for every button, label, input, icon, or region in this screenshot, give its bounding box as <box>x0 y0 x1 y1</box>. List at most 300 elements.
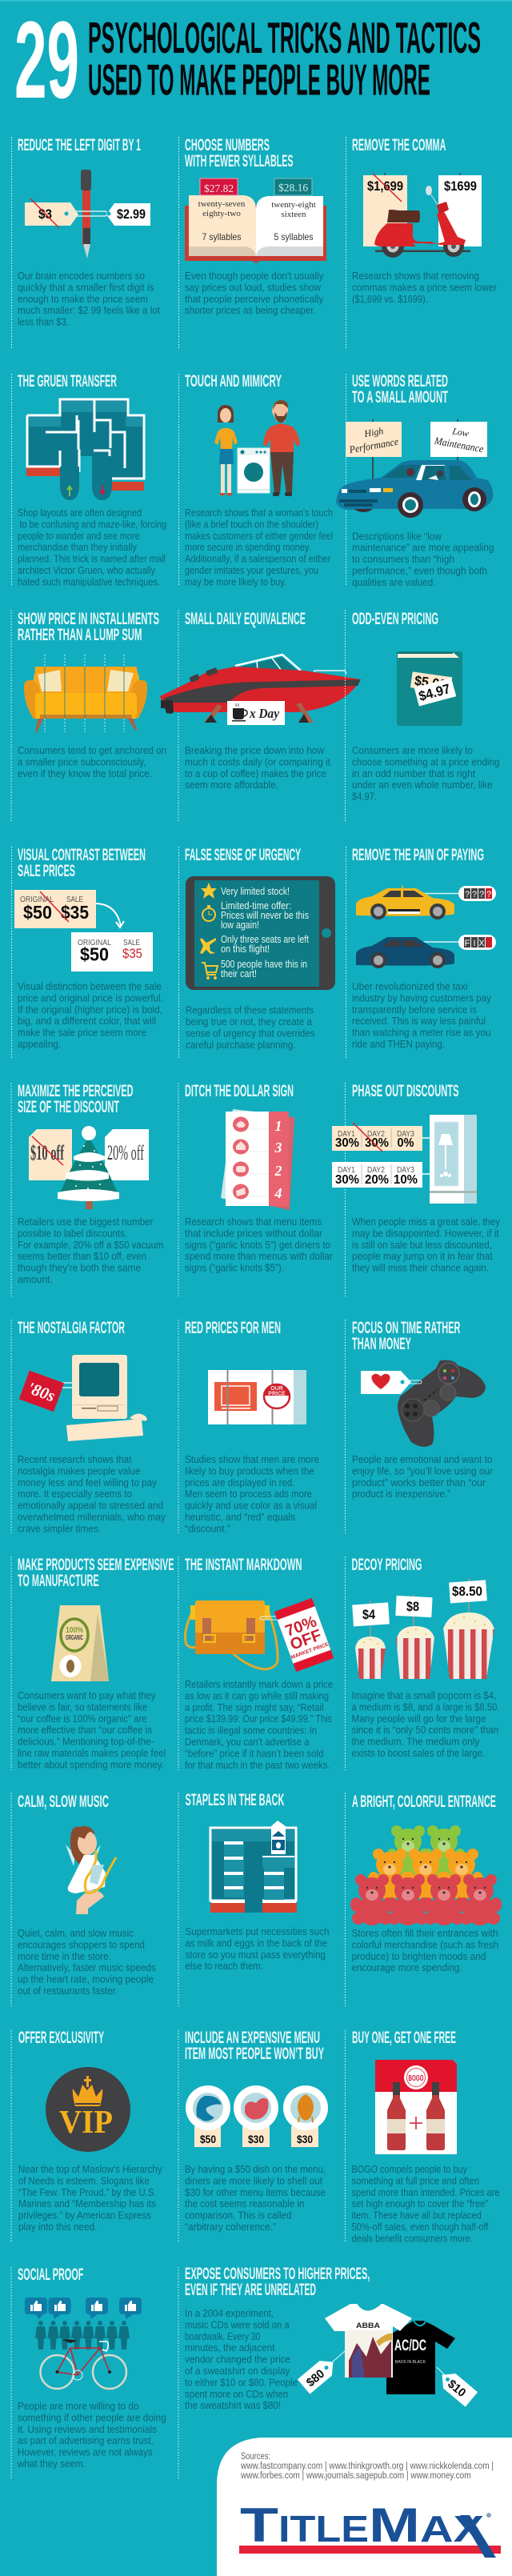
icon: tablet with urgency messages: on this flight! <box>221 943 270 955</box>
panel: phase out discounts <box>332 1081 501 1296</box>
panel: decoy pricing <box>346 1555 499 1770</box>
icon: yellow taxi with unknown fare: ? <box>465 890 470 899</box>
body text: price and original price is powerful. <box>18 992 163 1004</box>
panel: offer exclusivity <box>11 2028 162 2243</box>
heading: STAPLES IN THE BACK <box>186 1790 285 1809</box>
body text <box>352 745 500 803</box>
body text: more secure in spending money. <box>185 542 310 553</box>
body text: ($1,699 vs. $1699). <box>352 294 428 305</box>
body text: maintenance” are more appealing <box>352 543 494 554</box>
icon: speedboat with coffee a day sign <box>160 655 361 725</box>
icon: band t-shirts with price tags <box>298 2304 478 2407</box>
panel: maximize the perceived size of the discount <box>11 1081 163 1296</box>
body text: to consumers than “high <box>352 554 454 565</box>
icon: lamp and phased discount tags: DAY1 <box>338 1129 355 1139</box>
body text <box>185 1454 319 1534</box>
sources: Sources: <box>241 2452 270 2462</box>
icon: retro computer with 80s tag <box>19 1355 147 1441</box>
body text: signs (“garlic knots $5”). <box>185 1263 284 1274</box>
icon: tablet with urgency messages <box>186 876 335 990</box>
icon: price comparison cards <box>14 890 153 972</box>
heading <box>18 845 146 880</box>
panel: remove the pain of paying <box>346 845 496 1060</box>
icon: yellow taxi with unknown fare: ? <box>479 890 484 899</box>
body text: heuristic, and “red” equals <box>185 1512 295 1523</box>
body text: Regardless of these statements <box>186 1005 314 1016</box>
icon: tv and our price sticker: PRICE <box>268 1391 286 1397</box>
body text: Shop layouts are often designed <box>18 507 142 519</box>
body text <box>186 1005 315 1051</box>
icon: three popcorn tubs with prices: $8 <box>406 1599 419 1614</box>
body text: the cost seems reasonable in <box>185 2198 304 2209</box>
body text: under an even whole number, like <box>352 779 493 791</box>
icon: band t-shirts with price tags: BACK IN BLACK <box>395 2360 426 2365</box>
panel: the nostalgia factor <box>11 1318 166 1534</box>
panel: a bright, colorful entrance <box>346 1792 502 2006</box>
heading: MAXIMIZE THE PERCEIVED <box>18 1081 133 1100</box>
body text: believe is fair, so statements like <box>18 1701 147 1713</box>
icon: price comparison cards: $35 <box>61 902 89 923</box>
icon: yellow taxi with unknown fare: ? <box>472 890 477 899</box>
heading: DITCH THE DOLLAR SIGN <box>185 1081 294 1100</box>
body text: seem more affordable. <box>185 779 278 791</box>
body text <box>185 745 330 791</box>
icon: VIP badge with crown <box>46 2067 130 2152</box>
body text <box>352 531 494 588</box>
icon: open book with prices: twenty-eight <box>271 200 316 210</box>
body text: “The Few. The Proud.” by the U.S. <box>18 2187 157 2198</box>
body text: for that much in the past two weeks. <box>185 1760 330 1771</box>
icon: satchel with 70 percent off tag: 70% <box>283 1613 319 1641</box>
body text: qualities are valued. <box>352 577 435 588</box>
body text: vendor changed the price <box>185 2354 290 2366</box>
body text: Many people will go for the large <box>352 1713 486 1725</box>
icon: three dishes with prices <box>186 2085 328 2147</box>
body text: to a cup of coffee) makes the price <box>185 768 326 779</box>
body text: Consumers are more likely to <box>352 745 473 756</box>
panel: footer with sources and logo <box>217 2438 512 2576</box>
panel: reduce the left digit by 1 <box>11 135 160 350</box>
body text: quickly and use color as a visual <box>185 1500 317 1512</box>
body text: a profit. The sign might say, “Retail <box>185 1702 323 1713</box>
body text: price $139.99: Our price $49.99.” This <box>185 1713 332 1725</box>
icon: organic coffee bag: ORGANIC <box>66 1634 83 1641</box>
panel: reduce the left digit by 1: REDUCE THE LEFT DIGIT BY 1 <box>18 135 141 154</box>
icon: lamp and phased discount tags: 30% <box>365 1136 389 1150</box>
body text: If the original (higher price) is bold, <box>18 1004 162 1016</box>
body text: what they seem. <box>17 2458 86 2470</box>
body text <box>352 1928 498 1973</box>
body text: “discount.” <box>185 1523 230 1534</box>
icon: book with price labels: $5.00 <box>414 673 447 692</box>
body text: Consumers want to pay what they <box>18 1690 156 1701</box>
icon: dark car with fixed fare <box>356 935 496 968</box>
icon: dark car with fixed fare: F <box>465 939 470 948</box>
body text: Men seem to process ads more <box>185 1488 312 1500</box>
panel: touch and mimicry <box>179 371 333 587</box>
icon: lamp and phased discount tags: DAY3 <box>397 1165 414 1175</box>
body text: it. Using reviews and testimonials <box>18 2424 157 2435</box>
body text <box>186 1926 330 1972</box>
heading: CALM, SLOW MUSIC <box>18 1792 109 1811</box>
body text: Stores often fill their entrances with <box>352 1928 498 1939</box>
panel: small daily equivalence <box>160 609 361 823</box>
icon: tv and our price sticker <box>208 1370 306 1424</box>
body text <box>18 1454 166 1534</box>
body text: since it is “only 50 cents more” than <box>352 1725 498 1736</box>
body text: they will miss their chance again. <box>352 1263 489 1274</box>
panel: choose numbers with fewer syllables: WITH FEWER SYLLABLES <box>185 151 293 170</box>
body text: Supermarkets put necessities such <box>186 1926 330 1937</box>
icon: tablet with urgency messages: Only three seats are left <box>221 933 309 945</box>
heading <box>18 1081 133 1116</box>
icon: supermarket floor plan with milk <box>210 1821 297 1913</box>
body text: item. These have all but replaced <box>352 2210 482 2221</box>
body text <box>18 1928 156 1997</box>
body text: industry by having customers pay <box>352 992 492 1004</box>
title <box>14 0 481 122</box>
body text: performance,” even though both <box>352 565 487 576</box>
body text: Additionally, if a salesperson of either <box>185 554 330 565</box>
body text: encourages shoppers to spend <box>18 1939 145 1950</box>
icon: car with word signs <box>336 419 493 518</box>
logo: TitleMax: AX <box>420 2508 484 2550</box>
icon: organic coffee bag <box>51 1605 109 1681</box>
body text <box>185 1216 333 1274</box>
panel: include an expensive menu item <box>178 2028 328 2243</box>
body text: Retailers instantly mark down a price <box>185 1679 333 1690</box>
body text: amount. <box>18 1274 53 1285</box>
body text: Visual distinction between the sale <box>18 981 162 992</box>
body text: product is inexpensive.” <box>352 1488 450 1500</box>
body text: Consumers tend to get anchored on <box>18 745 166 756</box>
body text: Alternatively, faster music speeds <box>18 1962 156 1973</box>
body text: “our coffee is 100% organic” are <box>18 1713 147 1725</box>
panel: red prices for men <box>178 1318 319 1534</box>
body text: planned. This trick is named after mall <box>18 554 166 565</box>
panel: make products seem expensive to manufacture <box>11 1555 174 1770</box>
body text: Imagine that a small popcorn is $4, <box>352 1690 496 1701</box>
body text: People are emotional and want to <box>352 1454 493 1465</box>
panel: expose consumers to higher prices <box>178 2264 478 2479</box>
body text: signs (“garlic knots 5”) get diners to <box>185 1240 330 1251</box>
body text: product” works better than “our <box>352 1477 486 1488</box>
body text <box>18 1216 163 1285</box>
icon: lamp and phased discount tags: DAY2 <box>367 1165 385 1175</box>
icon: price comparison cards: ORIGINAL <box>20 895 54 904</box>
logo: TitleMax: ITLE <box>278 2508 369 2550</box>
icon: satchel with 70 percent off tag <box>186 1598 334 1672</box>
body text <box>352 1216 501 1274</box>
icon: open book with prices: eighty-two <box>202 209 241 218</box>
body text: to be confusing and maze-like, forcing <box>19 519 166 530</box>
title: 29 <box>14 0 79 122</box>
body text: play into this need. <box>18 2221 97 2233</box>
icon: scooter with price tags: $1,699 <box>367 178 403 194</box>
body text: Retailers use the biggest number <box>18 1216 153 1228</box>
icon: band t-shirts with price tags: $80 <box>304 2367 327 2390</box>
body text <box>185 2308 298 2411</box>
body text: In a 2004 experiment, <box>185 2308 274 2319</box>
icon: band t-shirts with price tags: AC/DC <box>394 2338 426 2354</box>
icon: organic coffee bag: 100% <box>66 1626 83 1635</box>
heading: EVEN IF THEY ARE UNRELATED <box>185 2280 316 2299</box>
icon: VIP badge with crown: VIP <box>59 2103 113 2140</box>
heading: SIZE OF THE DISCOUNT <box>18 1097 119 1116</box>
body text: else to reach them. <box>186 1961 263 1972</box>
body text: careful purchase planning. <box>186 1040 296 1051</box>
body text: store so you must pass everything <box>186 1949 326 1961</box>
body text: likely to buy products when the <box>185 1465 314 1476</box>
body text: Even though people don't usually <box>185 270 324 282</box>
icon: speedboat with coffee a day sign: x Day <box>249 706 279 721</box>
icon: open book with prices: 5 syllables <box>274 231 314 242</box>
icon: dark car with fixed fare: I <box>473 939 476 948</box>
icon: three popcorn tubs with prices: $4 <box>362 1607 375 1622</box>
icon: tablet with urgency messages: their cart! <box>221 968 257 980</box>
icon: woman, man and washing machine <box>214 400 300 496</box>
heading: ITEM MOST PEOPLE WON’T BUY <box>185 2044 324 2063</box>
body text <box>18 507 166 587</box>
icon: dark car with fixed fare: X <box>478 939 485 948</box>
body text: something at full price and often <box>352 2175 479 2186</box>
body text: seems better than $10 off, even <box>18 1251 146 1262</box>
body text: Research shows that a woman's touch <box>185 507 333 519</box>
icon: satchel with 70 percent off tag: OFF <box>288 1626 324 1654</box>
icon: open book with prices <box>185 178 326 263</box>
body text: is still on sale but less discounted, <box>352 1240 492 1251</box>
icon: lamp and phased discount tags: 30% <box>335 1136 359 1150</box>
body text: $30 for other menu items because <box>185 2187 326 2198</box>
body text <box>185 1679 333 1771</box>
logo: TitleMax <box>239 2498 501 2558</box>
body text <box>18 1690 166 1770</box>
body text: the sweatshirt was $80! <box>185 2400 281 2411</box>
body text: people may jump on it in fear that <box>352 1251 493 1262</box>
heading: VISUAL CONTRAST BETWEEN <box>18 845 146 864</box>
body text: line raw materials makes people feel <box>18 1748 166 1759</box>
icon: menu without dollar signs: 1 <box>275 1118 282 1134</box>
heading: SOCIAL PROOF <box>18 2265 83 2284</box>
body text <box>18 745 166 779</box>
icon: price comparison cards: SALE <box>66 895 83 904</box>
body text: comparison. This is called <box>185 2210 292 2221</box>
icon: lamp and phased discount tags: 30% <box>335 1173 359 1187</box>
icon: three dishes with prices: $30 <box>297 2133 313 2145</box>
icon: tablet with urgency messages: low again! <box>221 919 259 931</box>
body text: produce) to brighten moods and <box>352 1951 486 1962</box>
icon: pile of colorful teddy bears <box>350 1825 502 1925</box>
body text: more time in the store. <box>18 1951 111 1962</box>
body text: When people miss a great sale, they <box>352 1216 501 1228</box>
body text: spend more than menus with dollar <box>185 1251 333 1262</box>
body text: nostalgia makes people value <box>18 1465 141 1476</box>
icon: yellow taxi with unknown fare <box>356 886 496 919</box>
logo: TitleMax: M <box>369 2498 420 2552</box>
body text: something if other people are doing <box>18 2412 166 2423</box>
panel: buy one, get one free <box>346 2028 500 2244</box>
icon: car with word signs: Maintenance <box>433 435 485 455</box>
body text: Studies show that men are more <box>185 1454 319 1465</box>
body text: “arbitrary coherence.” <box>185 2221 276 2233</box>
icon: open book with prices: 7 syllables <box>202 231 242 242</box>
icon: angel with harp <box>66 1826 116 1914</box>
icon: pen with price tags <box>25 170 150 258</box>
body text: as part of advertising earns trust. <box>18 2435 154 2446</box>
heading <box>185 2028 324 2063</box>
body text: up the heart rate, moving people <box>18 1974 154 1985</box>
body text: Quiet, calm, and slow music <box>18 1928 134 1939</box>
body text: makes customers of either gender feel <box>185 531 333 542</box>
icon: two wine bottles with BOGO badge <box>375 2060 457 2154</box>
body text: a smaller price subconsciously, <box>18 756 146 767</box>
heading: MAKE PRODUCTS SEEM EXPENSIVE <box>18 1555 174 1574</box>
body text: much it costs daily (or comparing it <box>185 756 330 767</box>
body text: of a sweatshirt on display <box>185 2366 290 2377</box>
icon: scooter with price tags: $1699 <box>444 178 477 194</box>
body text: being true or not, they create a <box>186 1016 312 1028</box>
icon: price comparison cards: $50 <box>23 902 52 923</box>
icon: band t-shirts with price tags: ABBA <box>356 2322 381 2330</box>
body text: commas makes a price seem lower <box>352 282 497 293</box>
body text <box>352 270 497 305</box>
panel: odd-even pricing <box>346 609 500 823</box>
heading <box>18 609 159 644</box>
body text: of Needs is esteem. Slogans like <box>18 2175 150 2186</box>
body text: Our brain encodes numbers so <box>18 270 145 282</box>
panel: visual contrast between sale prices <box>11 845 163 1060</box>
icon: lamp and phased discount tags: 0% <box>397 1136 414 1150</box>
sources <box>240 2452 494 2481</box>
body text <box>17 2401 166 2470</box>
panel: ditch the dollar sign <box>178 1081 333 1296</box>
body text: quickly that a smaller first digit is <box>18 282 154 293</box>
body text <box>18 2164 162 2233</box>
icon: tablet with urgency messages: Very limited stock! <box>221 885 290 897</box>
body text <box>185 2164 326 2233</box>
panel: offer exclusivity: OFFER EXCLUSIVITY <box>18 2028 104 2047</box>
body text: received. This is way less painful <box>352 1016 486 1027</box>
body text: choose something at a price ending <box>352 756 500 767</box>
body text <box>18 981 163 1050</box>
icon: menu without dollar signs: 4 <box>274 1185 282 1201</box>
body text: better about spending more money. <box>18 1759 164 1770</box>
body text <box>352 2164 500 2244</box>
icon: book with price labels: $4.97 <box>417 681 452 704</box>
body text: big, and a different color, that will <box>18 1016 156 1027</box>
body text: deals benefit consumers more. <box>352 2233 473 2244</box>
body text: Breaking the price down into how <box>185 745 325 756</box>
body text: prices are displayed in red. <box>185 1477 294 1488</box>
body text: transparently before service is <box>352 1004 477 1016</box>
icon: open book with prices: $27.82 <box>204 182 234 194</box>
heading: SHOW PRICE IN INSTALLMENTS <box>18 609 159 628</box>
body text: 50%-off sales, even though half-off <box>352 2221 489 2233</box>
icon: menu without dollar signs <box>221 1109 294 1210</box>
body text: Research shows that removing <box>352 270 479 282</box>
body text: out of restaurants faster. <box>18 1985 118 1997</box>
panel: social proof <box>11 2265 166 2479</box>
body text: appealing. <box>18 1039 61 1050</box>
body text: shorter prices as being cheaper. <box>185 305 316 316</box>
icon: tablet with urgency messages: Limited-time offer: <box>221 899 291 911</box>
body text: boardwalk. Every 30 <box>185 2331 260 2342</box>
body text: that people perceive phonetically <box>185 294 324 305</box>
panel: the instant markdown <box>178 1555 334 1771</box>
icon: lamp and phased discount tags: DAY1 <box>338 1165 355 1175</box>
body text: Denmark, you can’t advertise a <box>185 1737 310 1748</box>
body text: Uber revolutionized the taxi <box>352 981 467 992</box>
body text <box>185 270 324 316</box>
body text: delicious.” Mentioning top-of-the- <box>18 1737 154 1748</box>
panel: use words related to a small amount <box>336 371 494 588</box>
body text: even if they know the total price. <box>18 768 152 779</box>
panel: the gruen transfer: THE GRUEN TRANSFER <box>18 371 117 391</box>
heading: SMALL DAILY EQUIVALENCE <box>185 609 306 628</box>
body text <box>352 981 492 1050</box>
body text: architect Victor Gruen, who actually <box>18 565 156 576</box>
heading: TO MANUFACTURE <box>18 1571 99 1590</box>
heading: THE INSTANT MARKDOWN <box>185 1555 302 1574</box>
icon: christmas tree with discount notes <box>29 1126 149 1209</box>
icon: scooter with price tags <box>363 173 482 258</box>
body text: Research shows that menu items <box>185 1216 322 1228</box>
body text: less than $3. <box>18 317 69 328</box>
body text: as milk and eggs in the back of the <box>186 1937 327 1949</box>
body text: $4.97. <box>352 791 377 803</box>
icon: tablet with urgency messages: Prices will never be this <box>221 909 309 921</box>
logo: TitleMax: T <box>240 2498 278 2552</box>
icon: price comparison cards: $50 <box>80 944 109 965</box>
icon: lamp and phased discount tags: 20% <box>365 1173 389 1187</box>
icon: menu without dollar signs: 2 <box>274 1163 282 1179</box>
body text: in an odd number that is right <box>352 768 475 779</box>
body text: exists to boost sales of the large. <box>352 1748 485 1759</box>
panel: remove the comma <box>346 135 497 350</box>
panel: show price in installments <box>11 609 166 823</box>
icon: three popcorn tubs with prices <box>352 1578 494 1679</box>
body text: Marines and “Membership has its <box>18 2198 156 2209</box>
icon: christmas tree with discount notes: 20% off <box>107 1141 144 1164</box>
body text: enough to make the price seem <box>18 294 148 305</box>
body text: more. It especially seems to <box>18 1488 132 1500</box>
panel: the gruen transfer <box>11 371 166 587</box>
body text: minutes, the adjacent <box>185 2342 275 2354</box>
panel: focus on time rather than money <box>346 1318 493 1533</box>
icon: sofa divided into installments <box>24 655 147 732</box>
heading: INCLUDE AN EXPENSIVE MENU <box>185 2028 320 2047</box>
icon: price comparison cards: ORIGINAL <box>78 938 111 947</box>
heading <box>352 1318 461 1353</box>
body text: tactic is illegal some countries: In <box>185 1725 317 1737</box>
body text: merchandise than they initially <box>18 542 138 553</box>
body text: gender imitates your gestures, you <box>185 565 318 576</box>
body text: sense of urgency that overrides <box>186 1028 315 1039</box>
heading: RATHER THAN A LUMP SUM <box>18 625 142 644</box>
body text: enjoy life, so “you’ll love using our <box>352 1465 493 1476</box>
body text: to either $10 or $80. People <box>185 2377 298 2388</box>
icon: lamp and phased discount tags: 10% <box>394 1173 418 1187</box>
icon: price comparison cards: $35 <box>122 946 142 961</box>
body text: that include prices without dollar <box>185 1228 322 1239</box>
panel: choose numbers with fewer syllables <box>179 135 326 350</box>
icon: three popcorn tubs with prices: $8.50 <box>452 1584 482 1599</box>
icon: yellow taxi with unknown fare: ? <box>486 890 491 899</box>
heading <box>185 2264 370 2299</box>
icon: lamp and phased discount tags: DAY3 <box>397 1129 414 1139</box>
body text: “before” price if it hasn’t been sold <box>185 1748 324 1759</box>
panel: false sense of urgency <box>179 845 335 1060</box>
